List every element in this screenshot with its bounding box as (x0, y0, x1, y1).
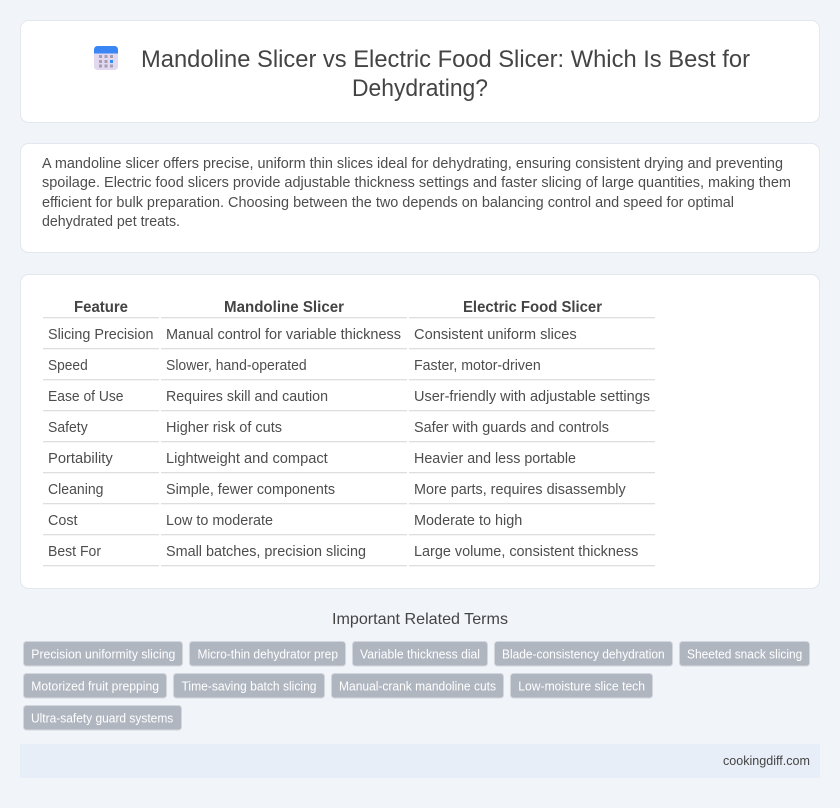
tag (332, 674, 504, 698)
table row: best for: Large volume, consistent thickness (414, 543, 638, 560)
table row: cost: Cost (48, 512, 78, 529)
table row: best for: Small batches, precision slicing (166, 543, 366, 560)
table row: slicing precision: Slicing Precision (48, 326, 154, 343)
table row: safety: Safer with guards and controls (414, 419, 609, 436)
text block: description: A mandoline slicer offers precise, uniform thin slices ideal for dehydrating, ensuring consistent drying and preventing (42, 155, 783, 172)
tag: Blade-consistency dehydration (502, 648, 665, 662)
table row: safety: Safety (48, 419, 88, 436)
table row: safety: Higher risk of cuts (166, 419, 282, 436)
table row: slicing precision: Consistent uniform slices (414, 326, 577, 343)
tag: Low-moisture slice tech (518, 680, 645, 694)
tag (510, 674, 652, 698)
tag (24, 674, 166, 698)
table header: Mandoline Slicer (224, 299, 344, 316)
tag: Time-saving batch slicing (182, 680, 317, 694)
table header: Electric Food Slicer (463, 299, 602, 316)
heading: related terms: Important Related Terms (332, 611, 508, 628)
table header: Feature (74, 299, 128, 316)
table row: cleaning: More parts, requires disassembly (414, 481, 626, 498)
tag (24, 706, 182, 730)
tag (494, 642, 672, 666)
title: Mandoline Slicer vs Electric Food Slicer: Which Is Best for (141, 46, 750, 73)
table row: ease of use: Requires skill and caution (166, 388, 328, 405)
panel: header (20, 20, 820, 122)
table row: cost: Moderate to high (414, 512, 522, 529)
table row: portability: Heavier and less portable (414, 450, 576, 467)
table row: portability: Lightweight and compact (166, 450, 329, 467)
text block: description (42, 155, 791, 230)
tag (352, 642, 488, 666)
table row: cost: Low to moderate (166, 512, 273, 529)
table row: cleaning (43, 481, 655, 504)
title (141, 46, 750, 102)
table row: ease of use (43, 388, 655, 411)
tag list: related terms (24, 642, 810, 730)
title: Dehydrating? (352, 75, 488, 102)
footer (20, 744, 820, 778)
tag (190, 642, 346, 666)
text block: description: spoilage. Electric food slicers provide adjustable thickness settings and faster slicing of large quantities, making them (42, 174, 791, 191)
tag: Precision uniformity slicing (31, 648, 175, 662)
table row: speed: Faster, motor-driven (414, 357, 541, 374)
panel: description (20, 144, 820, 252)
tag (24, 642, 182, 666)
table row: slicing precision (43, 326, 655, 349)
table row: best for: Best For (48, 543, 101, 560)
table row: ease of use: Ease of Use (48, 388, 124, 405)
table row: best for (43, 543, 655, 566)
table row: cleaning: Simple, fewer components (166, 481, 335, 498)
table row: speed (43, 357, 655, 380)
table row: safety (43, 419, 655, 442)
tag (680, 642, 810, 666)
tag: Micro-thin dehydrator prep (198, 648, 338, 662)
panel: comparison table (20, 274, 820, 588)
table header (43, 299, 655, 318)
table row: speed: Slower, hand-operated (166, 357, 307, 374)
table row: slicing precision: Manual control for variable thickness (166, 326, 401, 343)
table row: portability: Portability (48, 450, 113, 467)
text block: description: efficient for bulk preparation. Choosing between the two depends on balancing control and speed for optimal (42, 194, 734, 211)
table row: ease of use: User-friendly with adjustable settings (414, 388, 650, 405)
footer source text: cookingdiff.com (723, 753, 810, 768)
tag (174, 674, 324, 698)
table row: speed: Speed (48, 357, 88, 374)
tag: Motorized fruit prepping (31, 680, 159, 694)
table row: portability (43, 450, 655, 473)
tag: Ultra-safety guard systems (31, 712, 173, 726)
tag: Sheeted snack slicing (687, 648, 802, 662)
tag: Manual-crank mandoline cuts (339, 680, 496, 694)
icon: calendar (94, 46, 118, 70)
table row: cost (43, 512, 655, 535)
tag: Variable thickness dial (360, 648, 480, 662)
text block: description: dehydrated pet treats. (42, 213, 180, 230)
table row: cleaning: Cleaning (48, 481, 104, 498)
